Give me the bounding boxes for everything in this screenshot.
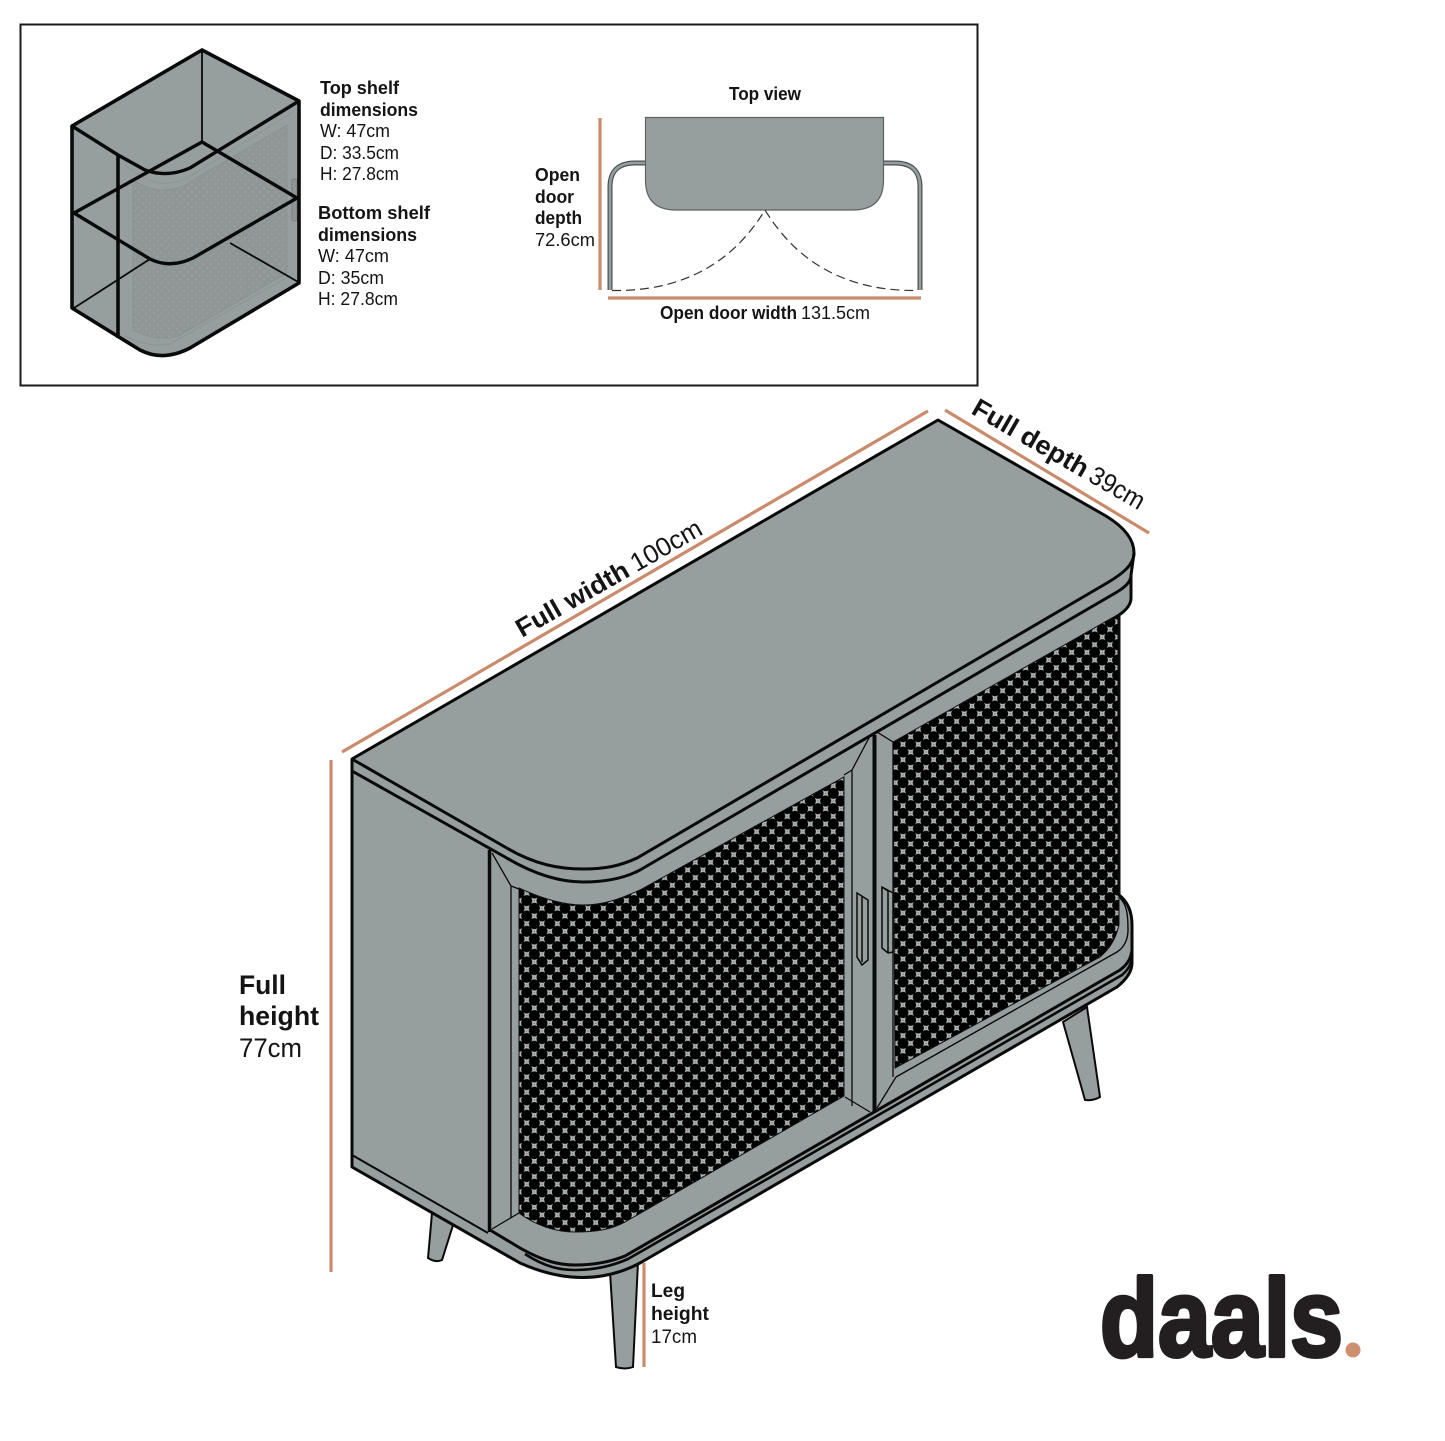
top shelf dimensions text: Top shelf [320, 78, 400, 98]
open door depth label: 72.6cm [535, 230, 595, 250]
leg height label [651, 1281, 710, 1348]
open door depth label: door [535, 187, 574, 207]
shelf cutaway cabinet diagram [72, 50, 300, 356]
full width label: 100cm [625, 513, 707, 578]
full width label: Full width [510, 555, 634, 643]
logo: daals: daals [1100, 1257, 1343, 1380]
top shelf dimensions text: W: 47cm [320, 121, 390, 141]
front leg [610, 1262, 638, 1368]
left door handle [857, 893, 868, 965]
inset frame [20, 24, 978, 386]
top shelf dimensions text: H: 27.8cm [320, 164, 399, 184]
full depth dimension line [945, 410, 1149, 533]
full height label: 77cm [239, 1033, 302, 1063]
full height label [239, 970, 319, 1063]
full height label: Full [239, 970, 286, 1000]
open door depth label [535, 165, 595, 250]
open door width label: 131.5cm [801, 303, 870, 323]
top shelf dimensions text [320, 78, 418, 184]
full depth label: Full depth [967, 392, 1095, 483]
open door width label [660, 303, 870, 323]
open door width dimension line [608, 296, 921, 300]
full depth label: 39cm [1084, 460, 1151, 516]
open door depth label: depth [535, 208, 582, 228]
cabinet outline [352, 420, 1134, 1278]
cabinet body [352, 420, 1134, 1278]
full height dimension line [329, 760, 333, 1272]
top view plan diagram [610, 118, 920, 291]
back right leg [1063, 1007, 1100, 1100]
panel: inset details [20, 24, 978, 386]
bottom shelf dimensions text [318, 203, 431, 309]
top shelf dimensions text: D: 33.5cm [320, 143, 399, 163]
right door mesh [893, 614, 1119, 1068]
bottom shelf dimensions text: Bottom shelf [318, 203, 431, 223]
leg height dimension line [642, 1263, 646, 1367]
full width label [510, 513, 707, 643]
full height label: height [239, 1001, 319, 1031]
bottom shelf dimensions text: H: 27.8cm [318, 289, 398, 309]
full depth label [967, 392, 1151, 516]
open door depth dimension line [598, 118, 602, 290]
top shelf dimensions text: dimensions [320, 100, 418, 120]
bottom shelf dimensions text: D: 35cm [318, 268, 384, 288]
back left leg [428, 1213, 454, 1261]
top view heading: Top view [729, 84, 802, 104]
bottom shelf dimensions text: dimensions [318, 225, 417, 245]
right door handle [882, 887, 893, 953]
left door mesh [519, 777, 844, 1232]
leg height label: Leg [651, 1281, 685, 1302]
leg height label: height [651, 1304, 710, 1325]
open door width label: Open door width [660, 303, 797, 323]
leg height label: 17cm [651, 1327, 697, 1348]
frame detail lines [352, 553, 1134, 1270]
open door depth label: Open [535, 165, 580, 185]
sideboard illustration [352, 420, 1134, 1368]
full width dimension line [342, 411, 928, 752]
bottom shelf dimensions text: W: 47cm [318, 246, 389, 266]
